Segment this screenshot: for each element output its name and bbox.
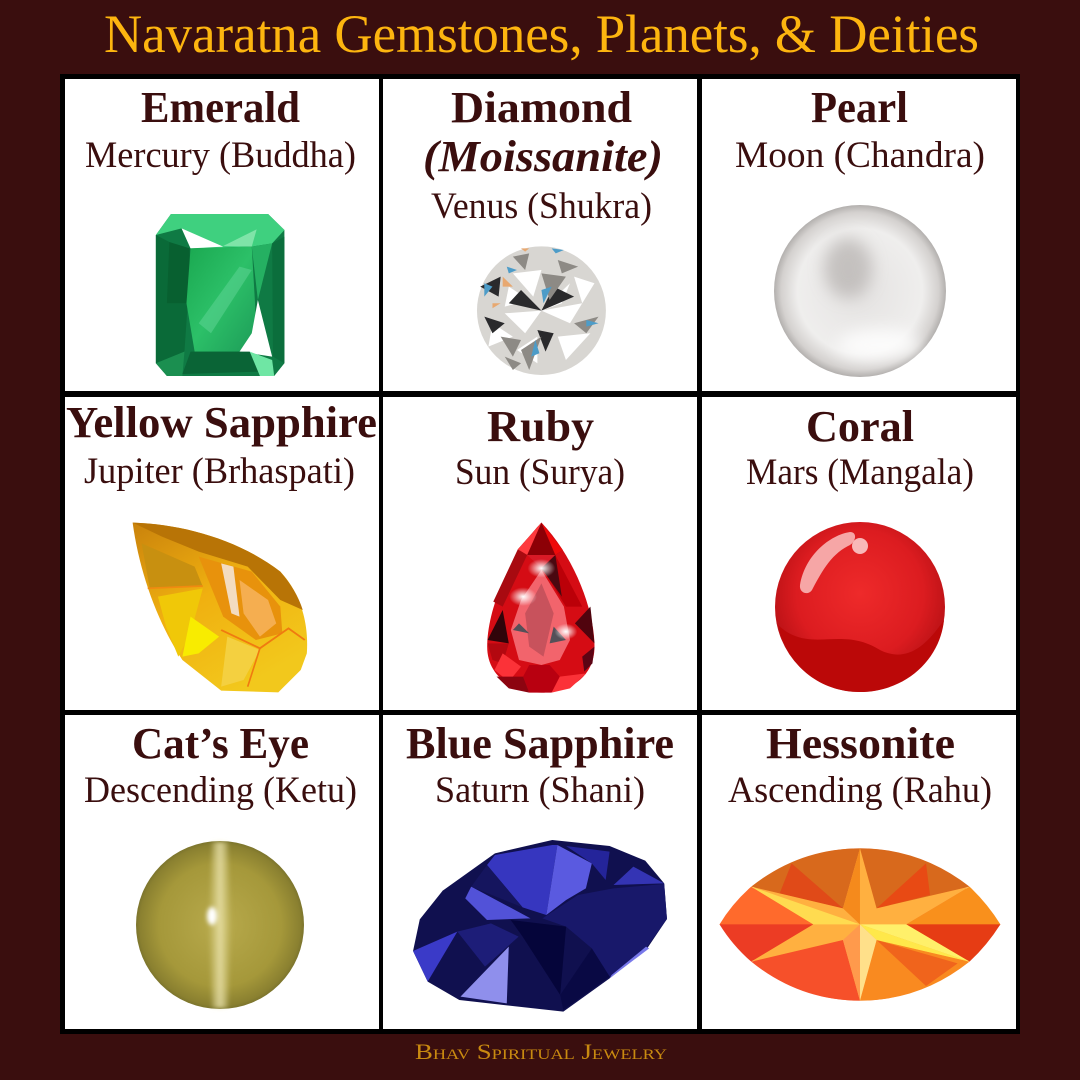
heading: Coral: Coral	[806, 402, 914, 451]
panel: Blue Sapphire	[383, 715, 697, 1029]
title: Navaratna Gemstones, Planets, & Deities	[104, 4, 979, 64]
heading: Hessonite: Hessonite	[766, 719, 955, 768]
panel: Diamond	[383, 79, 697, 391]
icon: hessonite gem	[720, 848, 1000, 1001]
text: Jupiter (Brhaspati): Jupiter (Brhaspati)	[84, 451, 355, 492]
icon: pearl gem	[774, 205, 946, 377]
icon: ruby gem	[487, 523, 594, 693]
text: Venus (Shukra): Venus (Shukra)	[431, 186, 652, 227]
icon: cat's eye gem	[136, 841, 304, 1009]
heading: Moissanite: (Moissanite)	[423, 132, 663, 181]
heading: Pearl: Pearl	[811, 83, 908, 132]
text: Mars (Mangala): Mars (Mangala)	[746, 452, 974, 493]
grid table	[60, 74, 1020, 1034]
text: Moon (Chandra): Moon (Chandra)	[735, 135, 985, 176]
icon: diamond gem	[477, 246, 606, 375]
text: Descending (Ketu): Descending (Ketu)	[84, 770, 357, 811]
heading: Blue Sapphire: Blue Sapphire	[406, 719, 674, 768]
icon: blue sapphire gem	[413, 840, 667, 1012]
heading: Yellow Sapphire: Yellow Sapphire	[66, 398, 377, 447]
footer brand: Bhav Spiritual Jewelry	[415, 1039, 667, 1064]
icon: emerald gem	[156, 214, 284, 376]
panel: Hessonite	[702, 715, 1016, 1029]
text: Saturn (Shani): Saturn (Shani)	[435, 770, 645, 811]
heading: Ruby: Ruby	[487, 402, 594, 451]
text: Mercury (Buddha): Mercury (Buddha)	[85, 135, 356, 176]
text: Ascending (Rahu): Ascending (Rahu)	[728, 770, 992, 811]
heading: Cat's Eye: Cat’s Eye	[132, 719, 309, 768]
panel: Cat's Eye	[65, 715, 379, 1029]
panel: Coral	[702, 397, 1016, 710]
panel: Pearl	[702, 79, 1016, 391]
heading: Diamond: Diamond	[451, 83, 632, 132]
icon: yellow sapphire gem	[133, 523, 307, 692]
heading: Emerald: Emerald	[141, 83, 300, 132]
panel: Yellow Sapphire	[65, 397, 379, 710]
icon: coral gem	[775, 522, 945, 692]
panel: Ruby	[383, 397, 697, 710]
panel: Emerald	[65, 79, 379, 391]
text: Sun (Surya): Sun (Surya)	[455, 452, 625, 493]
